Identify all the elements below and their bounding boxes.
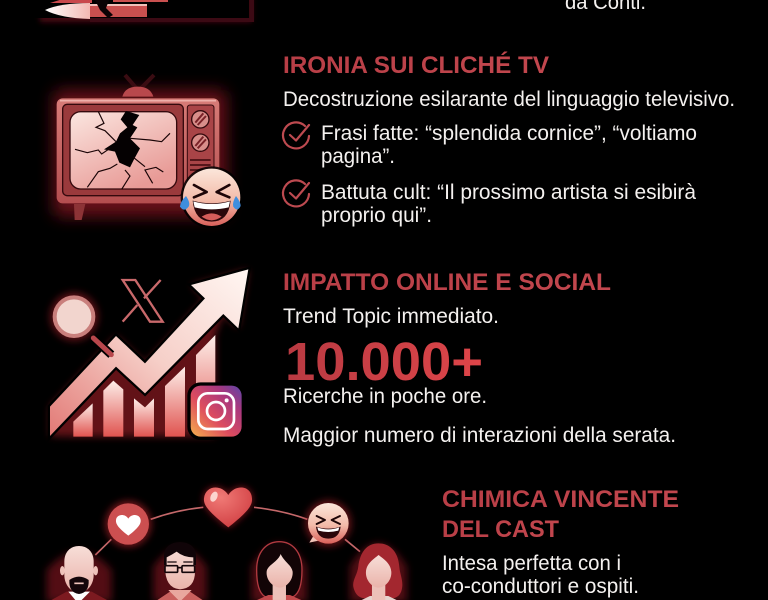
- icon: X logo: [123, 280, 163, 322]
- heading: Chimica: [442, 486, 679, 543]
- text: intesa: [442, 552, 639, 598]
- person 3: woman with dark bob: [252, 542, 307, 600]
- icon: big heart: [204, 487, 252, 527]
- heading: Chimica: DEL CAST: [442, 516, 559, 543]
- person 4: woman with wavy red hair: [350, 543, 407, 600]
- text: ricerche: Ricerche in poche ore.: [283, 385, 487, 408]
- illustration: broken TV with laughing emoji: [53, 75, 243, 228]
- text: trend topic: Trend Topic immediato.: [283, 305, 499, 328]
- icon: Instagram: [189, 384, 243, 438]
- text: intro: Decostruzione esilarante del linguaggio televisivo.: [283, 88, 735, 111]
- text: bullet 2: Battuta cult: “Il prossimo artista si esibirà: [321, 181, 696, 204]
- text: interazioni: Maggior numero di interazioni della serata.: [283, 424, 676, 447]
- text: bullet 1: pagina”.: [321, 145, 395, 168]
- text: intesa: co-conduttori e ospiti.: [442, 575, 639, 598]
- illustration: cast connected by hearts: [47, 487, 407, 600]
- icon: check 1: [283, 122, 309, 148]
- text: bullet 2: [321, 181, 696, 227]
- icon: check 2: [283, 180, 309, 206]
- illustration: growth chart with social icons: [50, 269, 248, 438]
- stat: 10.000+: 10.000+: [285, 332, 483, 392]
- knob lower: [192, 134, 209, 151]
- person 2: man with glasses: [153, 542, 207, 600]
- heading: Impatto: IMPATTO ONLINE E SOCIAL: [283, 269, 611, 296]
- text: intesa: Intesa perfetta con i: [442, 552, 621, 575]
- person 1: bald man with beard: [47, 546, 112, 600]
- icon: heart badge: [106, 501, 151, 547]
- text: bullet 1: [321, 122, 697, 168]
- illustration: cropped top scene: [28, 0, 252, 22]
- arrow: [50, 269, 248, 436]
- heading: Chimica: CHIMICA VINCENTE: [442, 486, 679, 513]
- emoji: laughing with tears: [180, 166, 243, 228]
- icon: magnifying glass: [50, 293, 111, 355]
- icon: laughing speech bubble: [306, 501, 351, 546]
- text: bullet 1: Frasi fatte: “splendida cornice”, “voltiamo: [321, 122, 697, 145]
- knob upper: [192, 111, 209, 128]
- heading: Ironia: IRONIA SUI CLICHÉ TV: [283, 51, 549, 79]
- connection arcs: [95, 507, 360, 555]
- text: bullet 2: proprio qui”.: [321, 204, 432, 227]
- bars: [73, 335, 215, 437]
- screen crack: [75, 111, 170, 189]
